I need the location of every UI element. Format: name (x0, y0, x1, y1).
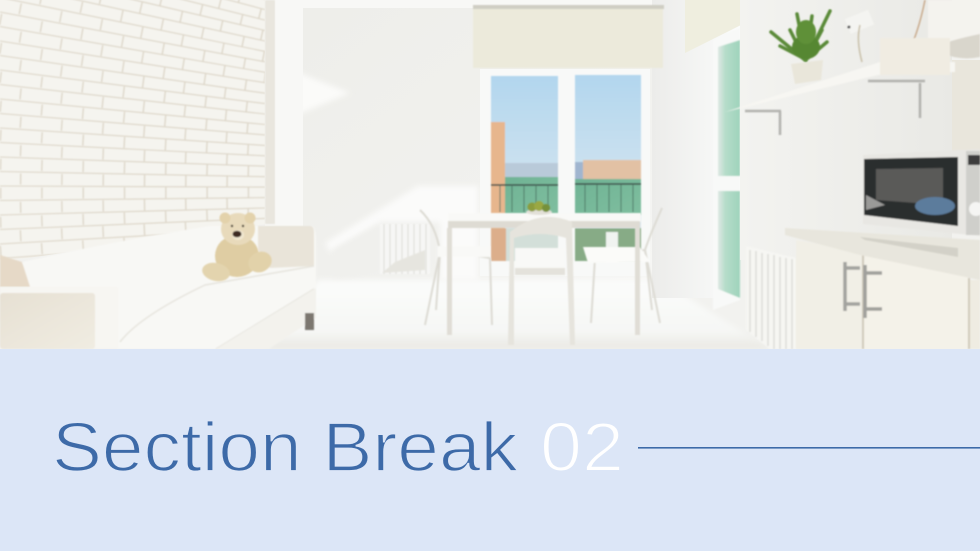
sofa leg (305, 313, 314, 330)
divider line (638, 447, 980, 449)
front arm (0, 287, 118, 349)
wall socket and cable (845, 0, 925, 62)
chairs left and right (420, 208, 662, 325)
title: Section Break 02: 02 (540, 408, 624, 486)
balcony window (480, 69, 650, 276)
right side wall (652, 0, 740, 298)
sofa back end cushion (258, 226, 314, 268)
wall pillar (265, 0, 303, 226)
photo: bright white apartment interior (0, 0, 980, 349)
brick wall (0, 0, 265, 265)
roller blind (473, 5, 664, 68)
boiler (928, 0, 980, 58)
icon: teddy bear (200, 212, 275, 284)
front chair (508, 217, 575, 345)
floor (268, 280, 770, 349)
table top (448, 213, 641, 222)
ceiling strip (265, 0, 685, 8)
back wall (303, 8, 668, 298)
below tabletop view (491, 228, 558, 261)
fruit bowl (526, 209, 552, 215)
bottom panel (0, 349, 980, 551)
sofa body (0, 226, 316, 349)
sunlight on back wall (325, 186, 478, 280)
title: Section Break 02: Section Break (52, 408, 519, 486)
dining table and chairs (420, 201, 662, 345)
kitchen wall (740, 0, 952, 260)
green courtyard (505, 177, 558, 215)
wall shelf (725, 38, 955, 135)
seat cushion edge (120, 266, 314, 349)
side window (713, 28, 740, 310)
kitchen counter and cabinets (785, 228, 980, 349)
microwave (863, 149, 980, 236)
radiator under back wall (380, 224, 430, 274)
table legs (447, 228, 452, 335)
sofa (0, 212, 316, 349)
blind on side wall (685, 0, 741, 53)
kitchen radiator (746, 246, 796, 349)
balcony railing (491, 184, 641, 185)
potted plant (771, 11, 830, 84)
city skyline (491, 122, 505, 260)
